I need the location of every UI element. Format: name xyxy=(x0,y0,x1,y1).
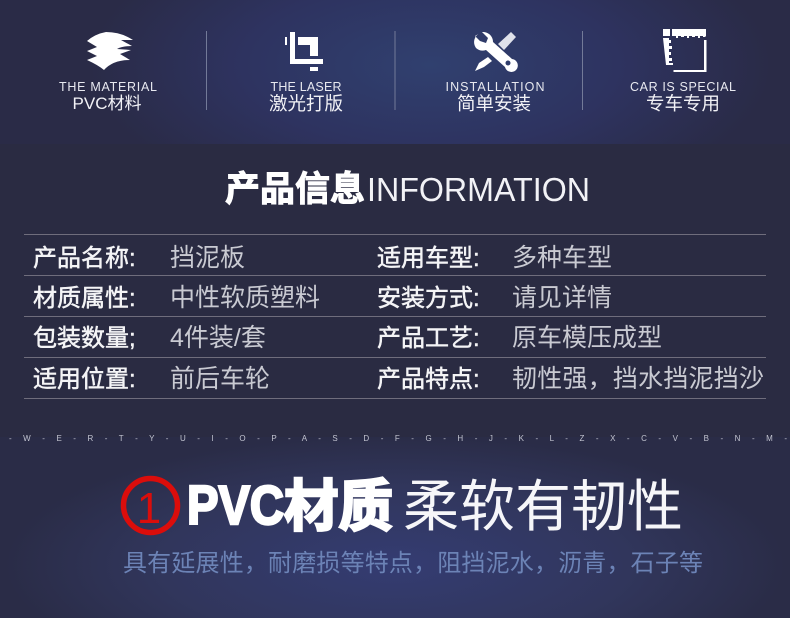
table: product specs: 适用位置: xyxy=(33,366,136,393)
icon: wrench and screwdriver xyxy=(474,32,518,72)
icon: laser crop xyxy=(285,32,323,71)
table: product specs xyxy=(24,234,766,399)
headline: pvc material: 柔软有韧性 xyxy=(403,475,683,538)
table: product specs: 挡泥板 xyxy=(170,244,245,272)
table: product specs: 韧性强，挡水挡泥挡沙 xyxy=(512,365,764,393)
table: product specs: 4件装/套 xyxy=(170,324,266,352)
icon: ruler frame xyxy=(663,29,706,72)
heading: product information xyxy=(225,170,590,209)
table: product specs: 多种车型 xyxy=(512,244,612,272)
table: product specs: 包装数量; xyxy=(33,325,136,352)
table: product specs: 前后车轮 xyxy=(170,365,270,393)
badge: number one: 1 xyxy=(137,484,161,533)
feature: car special xyxy=(630,29,736,114)
table: product specs: 原车模压成型 xyxy=(512,324,662,352)
panel: feature band xyxy=(0,0,790,144)
badge: number one xyxy=(124,478,178,533)
heading: product information: 产品信息 xyxy=(225,170,365,209)
feature: laser: THE LASER xyxy=(270,80,342,94)
table: product specs: 安装方式: xyxy=(377,285,480,312)
feature: material: PVC材料 xyxy=(73,94,141,113)
feature: material: THE MATERIAL xyxy=(59,80,157,94)
feature: installation xyxy=(446,32,544,114)
table: product specs: 产品名称: xyxy=(33,245,136,272)
headline: pvc material xyxy=(187,474,683,538)
icon: material layers xyxy=(87,32,133,70)
feature: car special: CAR IS SPECIAL xyxy=(630,80,736,94)
feature: installation: INSTALLATION xyxy=(446,80,544,94)
panel: pvc feature xyxy=(0,434,790,618)
subtitle: 具有延展性，耐磨损等特点，阻挡泥水，沥青，石子等 xyxy=(123,550,703,577)
headline: pvc material: 材质 xyxy=(284,475,393,538)
feature: car special: 专车专用 xyxy=(646,93,720,114)
heading: product information: INFORMATION xyxy=(367,171,590,208)
table: product specs: 适用车型: xyxy=(377,245,480,272)
feature: laser xyxy=(269,32,343,114)
table: product specs: 产品工艺: xyxy=(377,325,480,352)
feature: material xyxy=(59,32,157,113)
table: product specs: 材质属性: xyxy=(33,285,136,312)
headline: pvc material: PVC xyxy=(187,474,284,536)
feature: laser: 激光打版 xyxy=(269,93,343,114)
table: product specs: 中性软质塑料 xyxy=(170,284,320,312)
feature: installation: 简单安装 xyxy=(457,93,531,114)
table: product specs: 请见详情 xyxy=(512,284,612,312)
table: product specs: 产品特点: xyxy=(377,366,480,393)
alphabet strip: - W - E - R - T - Y - U - I - O - P - A - S - D - F - G - H - J - K - L - Z - X - C - V - B - N - M - xyxy=(9,434,787,443)
